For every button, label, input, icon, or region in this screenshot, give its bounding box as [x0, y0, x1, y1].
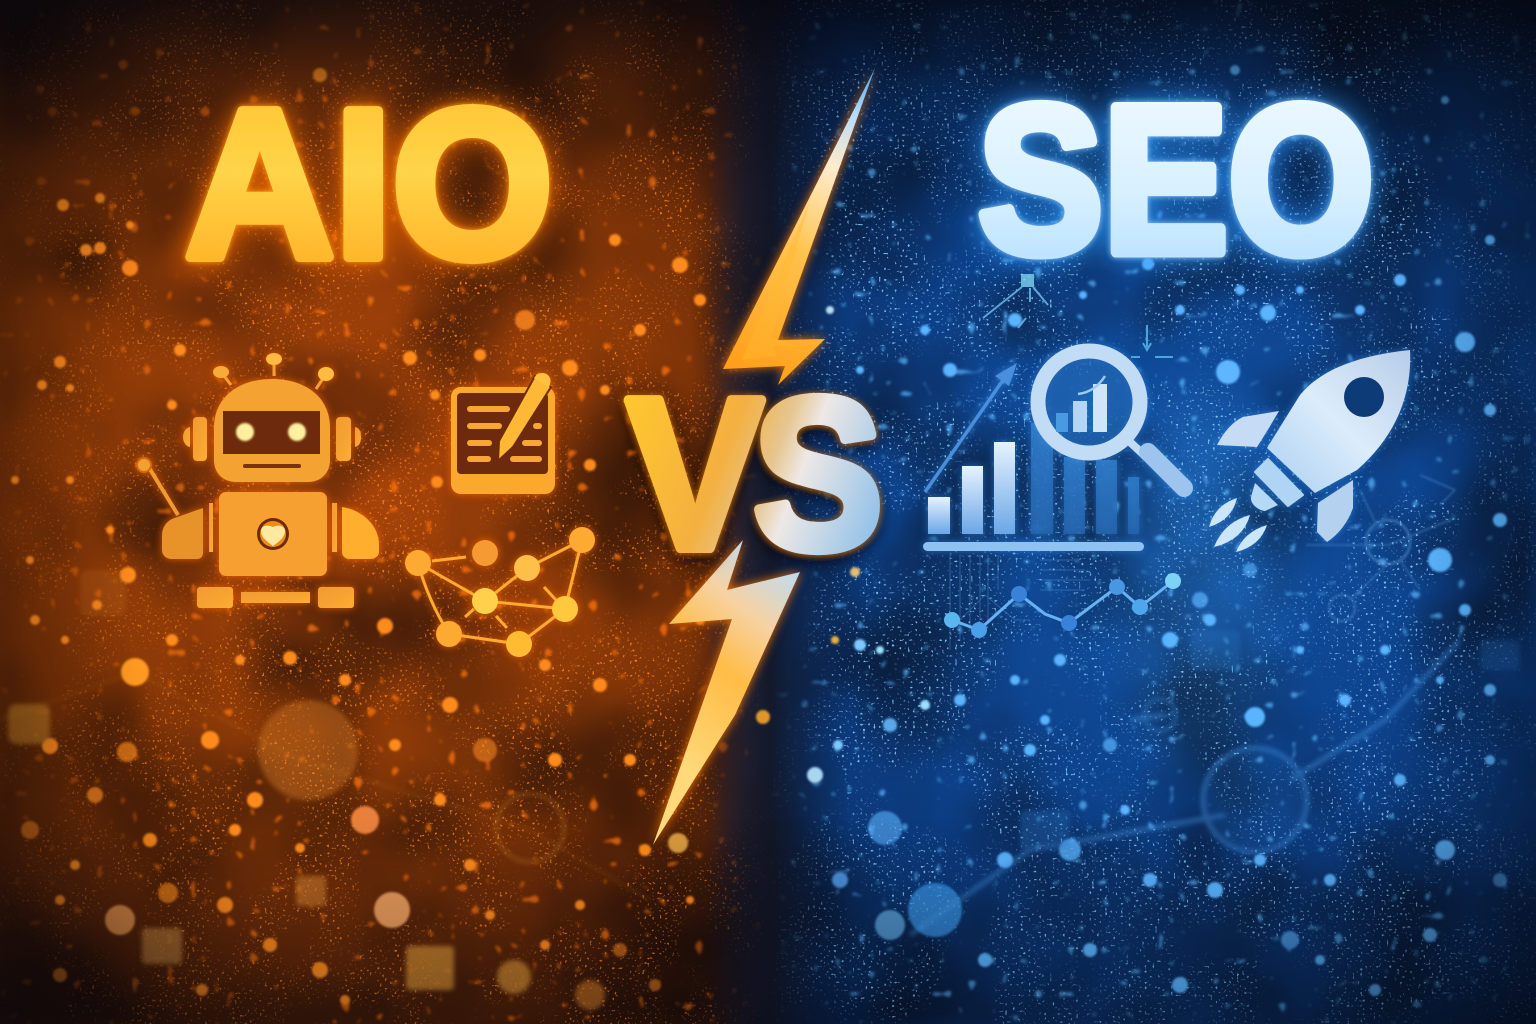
robot ears: [183, 417, 361, 461]
engine band: [1255, 459, 1303, 506]
icon: magnifying glass: [1038, 351, 1184, 488]
baseline: [923, 542, 1144, 551]
icon: bar chart with arrow: [923, 363, 1144, 551]
handle: [1130, 442, 1184, 488]
title: SEO: SEO: [978, 62, 1374, 297]
robot body: [219, 492, 327, 576]
robot probe: [137, 458, 178, 515]
icon: network graph: [405, 527, 595, 657]
bright bars: [928, 442, 1015, 534]
fine orange particle speckle: [0, 0, 764, 1024]
icon: faint node at top of chart: [983, 274, 1048, 328]
robot eyes: [236, 423, 306, 441]
icon: crosshair mark: [1131, 325, 1173, 357]
robot head: [214, 379, 330, 482]
fine blue particle speckle: [772, 0, 1536, 1024]
icon: document and pencil: [451, 373, 555, 494]
icon: rocket: [1209, 350, 1410, 552]
title: AIO: AIO: [185, 65, 553, 302]
letter S: S: [753, 353, 883, 594]
faint blue network, lower right: [910, 630, 1520, 935]
chart grid: [950, 555, 1090, 650]
trend arrow: [925, 363, 1017, 492]
lightning bolt: lower: [653, 540, 800, 845]
blue bokeh particles: [807, 65, 1507, 996]
rocket window: [1344, 377, 1384, 417]
lens ring: [1038, 351, 1140, 453]
lower fin: [1317, 480, 1353, 542]
pencil: [498, 373, 551, 461]
document frame: [451, 387, 555, 494]
large dim orange shapes, lower left: [0, 570, 650, 1010]
robot feet: [197, 587, 354, 608]
lightning bolt: upper: [723, 68, 875, 385]
robot heart core: [257, 518, 289, 550]
robot visor: [223, 411, 320, 454]
title: VS: [627, 353, 883, 594]
upper fin: [1217, 411, 1279, 447]
chart points: [944, 573, 1181, 638]
orange bokeh particles: [11, 68, 770, 1005]
chart line: [952, 581, 1173, 630]
network nodes: [405, 527, 595, 657]
rocket hull: [1267, 350, 1410, 493]
icon: robot: [137, 353, 379, 608]
medium blue particle blobs: [772, 0, 1536, 1024]
document lines: [467, 406, 542, 462]
dim bars: [1031, 423, 1139, 534]
lens bars: [1056, 376, 1107, 432]
robot arms: [162, 503, 379, 559]
robot mouth: [243, 464, 301, 468]
letter V: V: [627, 353, 763, 594]
line chart: [944, 555, 1181, 650]
medium orange particle blobs: [0, 0, 760, 1024]
nozzle: [1251, 483, 1278, 511]
robot antennas: [213, 353, 334, 389]
network links: [418, 540, 582, 644]
faint hexagon network, right of rocket: [1306, 475, 1455, 621]
flames: [1209, 498, 1267, 552]
